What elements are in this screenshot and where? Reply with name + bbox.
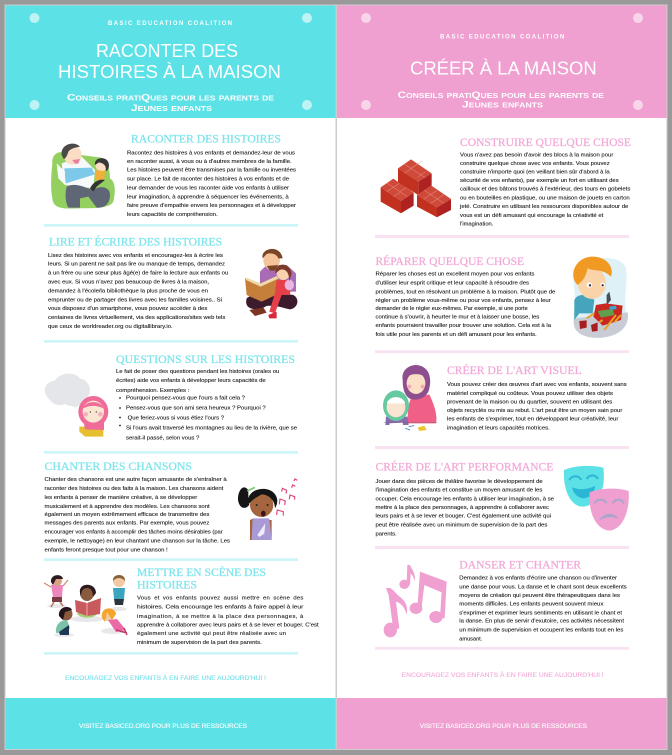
section: chanter des chansons: exemple, le nettoyage) en leur chantant une chanson sur la tâche. Les bbox=[44, 539, 230, 545]
divider bbox=[375, 235, 629, 238]
section: chanter des chansons: raconter des histoires ou des faits à la maison. Les chansons aident bbox=[44, 486, 224, 492]
section: construire quelque chose: construire n'importe quoi (en veillant bien sûr d'abord à la bbox=[460, 170, 610, 176]
section: questions sur les histoires: Que feriez-vous si vous étiez l'ours ? bbox=[128, 416, 225, 422]
section: raconter des histoires: Les histoires peuvent être transmises par la famille ou inventées bbox=[127, 168, 296, 174]
icon: father and child in green armchair bbox=[51, 144, 115, 209]
section: raconter des histoires: leur imagination, à apprendre à séquencer les événements, à bbox=[127, 194, 289, 200]
divider bbox=[375, 647, 629, 650]
section: chanter des chansons: musicalement et à apprendre des modèles. Les chansons sont bbox=[44, 504, 210, 510]
section: lire et écrire des histoires: avec eux. Si vous n'avez pas beaucoup de livres à la maison, bbox=[48, 280, 209, 286]
section: construire quelque chose: ou en bouteilles en plastique, ou une maison de jouets en carton bbox=[460, 195, 630, 201]
section: réparer quelque chose: demander de le régler eux-mêmes. Par exemple, si une porte bbox=[376, 306, 528, 312]
section: lire et écrire des histoires: emprunter ou de partager des livres avec les familles voisines.. Si bbox=[48, 298, 222, 304]
footer banner: right bbox=[337, 698, 666, 749]
section: réparer quelque chose bbox=[376, 254, 556, 338]
section: questions sur les histoires: compréhension. Exemples : bbox=[116, 388, 190, 394]
happy mask bbox=[564, 466, 604, 507]
section: questions sur les histoires: écrites) aide vos enfants à développer leurs capacités de bbox=[116, 378, 266, 384]
icon: father reading a book with daughter bbox=[245, 249, 297, 318]
section: raconter des histoires: Racontez des histoires à vos enfants et demandez-leur de vous bbox=[127, 151, 295, 157]
divider bbox=[375, 546, 629, 549]
section: raconter des histoires: en raconter aussi, à vous ou à d'autres membres de la famille. bbox=[127, 159, 292, 165]
section: construire quelque chose: CONSTRUIRE QUELQUE CHOSE bbox=[460, 136, 631, 149]
call to action: ENCOURAGEZ VOS ENFANTS À EN FAIRE UNE AUJOURD'HUI ! bbox=[65, 673, 266, 682]
section: créer de l'art performance: Jouer dans des pièces de théâtre favorise le développement de bbox=[376, 479, 543, 485]
section: créer de l'art visuel: matériel compliqué ou coûteux. Vous pouvez utiliser des objets bbox=[447, 391, 613, 397]
call to action: ENCOURAGEZ VOS ENFANTS À EN FAIRE UNE AUJOURD'HUI ! bbox=[402, 670, 604, 679]
sad mask bbox=[589, 489, 629, 531]
section: réparer quelque chose: problèmes, tout en résolvant un problème à la maison. Plutôt que de bbox=[376, 289, 556, 295]
icon: mother and daughter making art bbox=[383, 365, 438, 431]
icon: theatre masks bbox=[564, 466, 629, 531]
section: danser et chanter: amusant. bbox=[459, 637, 483, 643]
section: créer de l'art visuel: provenant de la maison ou du quartier, souvent en utilisant des bbox=[447, 400, 612, 406]
section: créer de l'art visuel bbox=[447, 363, 627, 432]
section: réparer quelque chose: fois utile pour les parents et un défi amusant pour les enfants. bbox=[376, 332, 537, 338]
icon: thought cloud and girl in pink hijab bbox=[45, 374, 108, 437]
section: chanter des chansons: messages des parents aux enfants. Par exemple, vous pouvez bbox=[44, 521, 209, 527]
icon: singing girl with music notes bbox=[238, 479, 297, 540]
section: créer de l'art performance: l'imagination des enfants et constitue un moyen amusant de les bbox=[376, 488, 542, 494]
section: lire et écrire des histoires: Lisez des histoires avec vos enfants et encouragez-les à écrire les bbox=[48, 253, 223, 259]
divider bbox=[44, 224, 298, 227]
section: créer de l'art performance: CRÉER DE L'ART PERFORMANCE bbox=[376, 460, 553, 474]
section: créer de l'art visuel: objets recyclés ou mis au rebut. L'art peut être un moyen sain pour bbox=[447, 408, 622, 414]
section: construire quelque chose: Vous n'avez pas besoin d'avoir des blocs à la maison pour bbox=[460, 153, 613, 159]
footer banner: left: VISITEZ BASICED.ORG POUR PLUS DE RESSOURCES bbox=[79, 723, 248, 730]
header banner: left bbox=[6, 6, 336, 118]
section: réparer quelque chose: enfants pourraient travailler pour trouver une solution. Cela est à la bbox=[376, 323, 552, 329]
section: danser et chanter: la danse. En plus de servir d'exutoire, ces activités nécessitent bbox=[459, 619, 624, 625]
header banner: right: Conseils pratiQues pour les parents de bbox=[398, 90, 604, 101]
section: construire quelque chose: jeté. Construire en utilisant les ressources disponibles autour de bbox=[459, 204, 629, 210]
section: créer de l'art visuel: Vous pouvez créer des œuvres d'art avec vos enfants, souvent sans bbox=[447, 382, 627, 388]
section: danser et chanter bbox=[459, 558, 627, 643]
divider bbox=[375, 350, 629, 353]
section: réparer quelque chose: Réparer les choses est un excellent moyen pour vos enfants bbox=[376, 272, 534, 278]
boy in teal crouching bbox=[56, 607, 72, 635]
divider bbox=[44, 558, 298, 561]
section: chanter des chansons: encourager vos enfants à accomplir des tâches moins désirables (par bbox=[44, 530, 223, 536]
section: construire quelque chose: cailloux et des bâtons trouvés à l'extérieur, des tours en gobelets bbox=[460, 187, 630, 193]
icon: red bricks bbox=[381, 159, 451, 217]
section: créer de l'art performance: parents. bbox=[376, 532, 397, 538]
section: créer de l'art performance: leurs pairs et à se lever et bouger. C'est également une activité qui bbox=[376, 514, 551, 520]
section: lire et écrire des histoires: leurs. Si un parent ne sait pas lire ou manque de temps, demandez bbox=[48, 262, 225, 268]
section: danser et chanter: DANSER ET CHANTER bbox=[459, 558, 581, 571]
section: questions sur les histoires bbox=[116, 353, 298, 442]
section: mettre en scène des histoires: imagination, à se mettre à la place des personnages, à bbox=[137, 614, 304, 620]
brick left bbox=[381, 179, 414, 213]
section: chanter des chansons: également un moyen extrêmement efficace de transmettre des bbox=[44, 512, 209, 518]
divider bbox=[44, 451, 298, 454]
panel: Raconter des histoires à la maison bbox=[5, 5, 336, 750]
section: mettre en scène des histoires: également une activité qui peut être réalisée avec un bbox=[137, 631, 286, 637]
section: danser et chanter: un minimum de supervision et occupent les enfants tout en les bbox=[459, 628, 623, 634]
section: mettre en scène des histoires bbox=[137, 565, 319, 646]
section: créer de l'art performance: occuper. Cela encourage les enfants à utiliser leur imagination, à se bbox=[376, 496, 555, 502]
header banner: left: RACONTER DES bbox=[96, 40, 238, 61]
section: lire et écrire des histoires: demandez à l'école/la bibliothèque la plus proche de vous en bbox=[48, 289, 208, 295]
header banner: left: HISTOIRES À LA MAISON bbox=[58, 61, 281, 82]
brick right bbox=[417, 185, 451, 217]
section: raconter des histoires bbox=[127, 133, 296, 218]
section: questions sur les histoires: QUESTIONS SUR LES HISTOIRES bbox=[116, 353, 295, 366]
section: créer de l'art visuel: CRÉER DE L'ART VISUEL bbox=[447, 363, 582, 377]
header banner: left: Jeunes enfants bbox=[131, 103, 212, 114]
section: chanter des chansons: Chanter des chansons est une autre façon amusante de s'entraîner à bbox=[44, 477, 227, 483]
section: raconter des histoires: faire preuve d'empathie envers les personnages et à développer bbox=[127, 203, 296, 209]
section: danser et chanter: moments difficiles. Les enfants peuvent souvent mieux bbox=[459, 602, 603, 608]
section: questions sur les histoires: Si l'ours avait traversé les montagnes au lieu de la rivière, que se bbox=[126, 425, 298, 431]
icon: boy repairing a robot bbox=[573, 257, 628, 338]
section: lire et écrire des histoires: à un frère ou une sœur plus âgé(e) de faire la lecture aux enfants ou bbox=[48, 271, 228, 277]
section: réparer quelque chose: RÉPARER QUELQUE CHOSE bbox=[376, 254, 524, 268]
section: lire et écrire des histoires: que ceux de worldreader.org ou digitallibrary.io. bbox=[48, 324, 173, 330]
section: réparer quelque chose: d'utiliser leur esprit critique et leur capacité à résoudre des bbox=[376, 281, 529, 287]
section: mettre en scène des histoires: Vous et vos enfants pouvez aussi mettre en scène des bbox=[137, 596, 303, 602]
section: questions sur les histoires: Le fait de poser des questions pendant les histoires (orales ou bbox=[116, 369, 279, 375]
section: raconter des histoires: leur demander de vous les raconter aide vos enfants à utiliser bbox=[127, 185, 289, 191]
reading child with book bbox=[75, 585, 101, 618]
header banner: left: Conseils pratiQues pour les parents de bbox=[67, 93, 274, 104]
section: mettre en scène des histoires: HISTOIRES bbox=[137, 579, 197, 592]
girl in pink crawling bbox=[102, 608, 127, 635]
header banner: right: BASIC EDUCATION COALITION bbox=[440, 35, 564, 41]
section: construire quelque chose: sécurité de vos enfants), par exemple un fort en utilisant des bbox=[460, 178, 619, 184]
section: mettre en scène des histoires: METTRE EN SCÈNE DES bbox=[137, 565, 266, 579]
header banner: right: Jeunes enfants bbox=[462, 100, 543, 111]
footer banner: right: VISITEZ BASICED.ORG POUR PLUS DE RESSOURCES bbox=[420, 723, 588, 730]
boy in blue bbox=[113, 575, 125, 605]
section: danser et chanter: s'exprimer et exprimer leurs sentiments en utilisant le chant et bbox=[459, 611, 622, 617]
section: créer de l'art visuel: les enfants de s'exprimer, tout en développant leur créativité, leur bbox=[447, 417, 618, 423]
header banner: right bbox=[337, 6, 666, 118]
icon: music notes bbox=[384, 565, 447, 637]
divider bbox=[375, 446, 629, 449]
section: lire et écrire des histoires bbox=[48, 235, 228, 330]
section: mettre en scène des histoires: apprendre à collaborer avec leurs pairs et à se lever et bouger. C'est bbox=[137, 622, 319, 628]
section: chanter des chansons bbox=[44, 460, 230, 554]
section: construire quelque chose: vous est un défi amusant qui encourage la créativité et bbox=[460, 213, 604, 219]
footer banner: left bbox=[6, 698, 336, 749]
girl in pink arms raised bbox=[44, 575, 68, 607]
section: questions sur les histoires: Pensez-vous que son ami sera heureux ? Pourquoi ? bbox=[126, 406, 266, 412]
section: créer de l'art performance: mettre à la place des personnages, à apprendre à collaborer avec bbox=[376, 505, 549, 511]
section: lire et écrire des histoires: vous disposez d'un smartphone, vous pouvez accéder à des bbox=[48, 306, 207, 312]
section: mettre en scène des histoires: histoires. Cela encourage les enfants à faire appel à leur bbox=[137, 605, 303, 611]
section: créer de l'art performance: peut être réalisée avec un minimum de supervision de la part des bbox=[376, 523, 547, 529]
section: construire quelque chose: l'imagination. bbox=[460, 221, 494, 227]
header banner: left: BASIC EDUCATION COALITION bbox=[108, 21, 232, 27]
section: danser et chanter: Demandez à vos enfants d'écrire une chanson ou d'inventer bbox=[459, 576, 617, 582]
section: chanter des chansons: CHANTER DES CHANSONS bbox=[44, 460, 192, 473]
section: raconter des histoires: RACONTER DES HISTOIRES bbox=[131, 133, 281, 146]
brick top bbox=[398, 159, 432, 195]
section: lire et écrire des histoires: LIRE ET ÉCRIRE DES HISTOIRES bbox=[49, 235, 222, 249]
icon: children acting out a story bbox=[44, 575, 127, 637]
section: réparer quelque chose: régler un problème vous-même ou pour vos enfants, pensez à leur bbox=[376, 298, 551, 304]
section: danser et chanter: moyens de création qui peuvent être thérapeutiques dans les bbox=[459, 593, 620, 599]
section: lire et écrire des histoires: centaines de livres virtuellement, via des applications/sites web tels bbox=[48, 315, 225, 321]
divider bbox=[44, 652, 298, 655]
section: chanter des chansons: les enfants à penser de manière créative, à se développer bbox=[44, 495, 197, 501]
divider bbox=[44, 340, 298, 343]
section: créer de l'art visuel: imagination et leurs capacités motrices. bbox=[447, 426, 550, 432]
section: créer de l'art performance bbox=[376, 460, 555, 538]
section: questions sur les histoires: serait-il passé, selon vous ? bbox=[126, 436, 200, 442]
section: construire quelque chose: construire quelque chose avec vos enfants. Vous pouvez bbox=[460, 161, 610, 167]
section: réparer quelque chose: continue à s'ouvrir, à heurter le mur et à laisser une bosse, les bbox=[376, 315, 539, 321]
section: raconter des histoires: sur place. Le fait de raconter des histoires à vos enfants et de bbox=[127, 177, 290, 183]
section: mettre en scène des histoires: minimum de supervision de la part des parents. bbox=[137, 640, 262, 646]
section: danser et chanter: une danse pour vous. La danse et le chant sont deux excellents bbox=[459, 584, 627, 590]
header banner: right: CRÉER À LA MAISON bbox=[410, 58, 597, 79]
section: raconter des histoires: leurs capacités de compréhension. bbox=[127, 212, 218, 218]
panel: Créer à la maison bbox=[336, 5, 667, 750]
section: chanter des chansons: enfants feront presque tout pour une chanson ! bbox=[44, 548, 168, 554]
section: construire quelque chose bbox=[459, 136, 631, 227]
section: questions sur les histoires: Pourquoi pensez-vous que l'ours a fait cela ? bbox=[126, 396, 246, 402]
